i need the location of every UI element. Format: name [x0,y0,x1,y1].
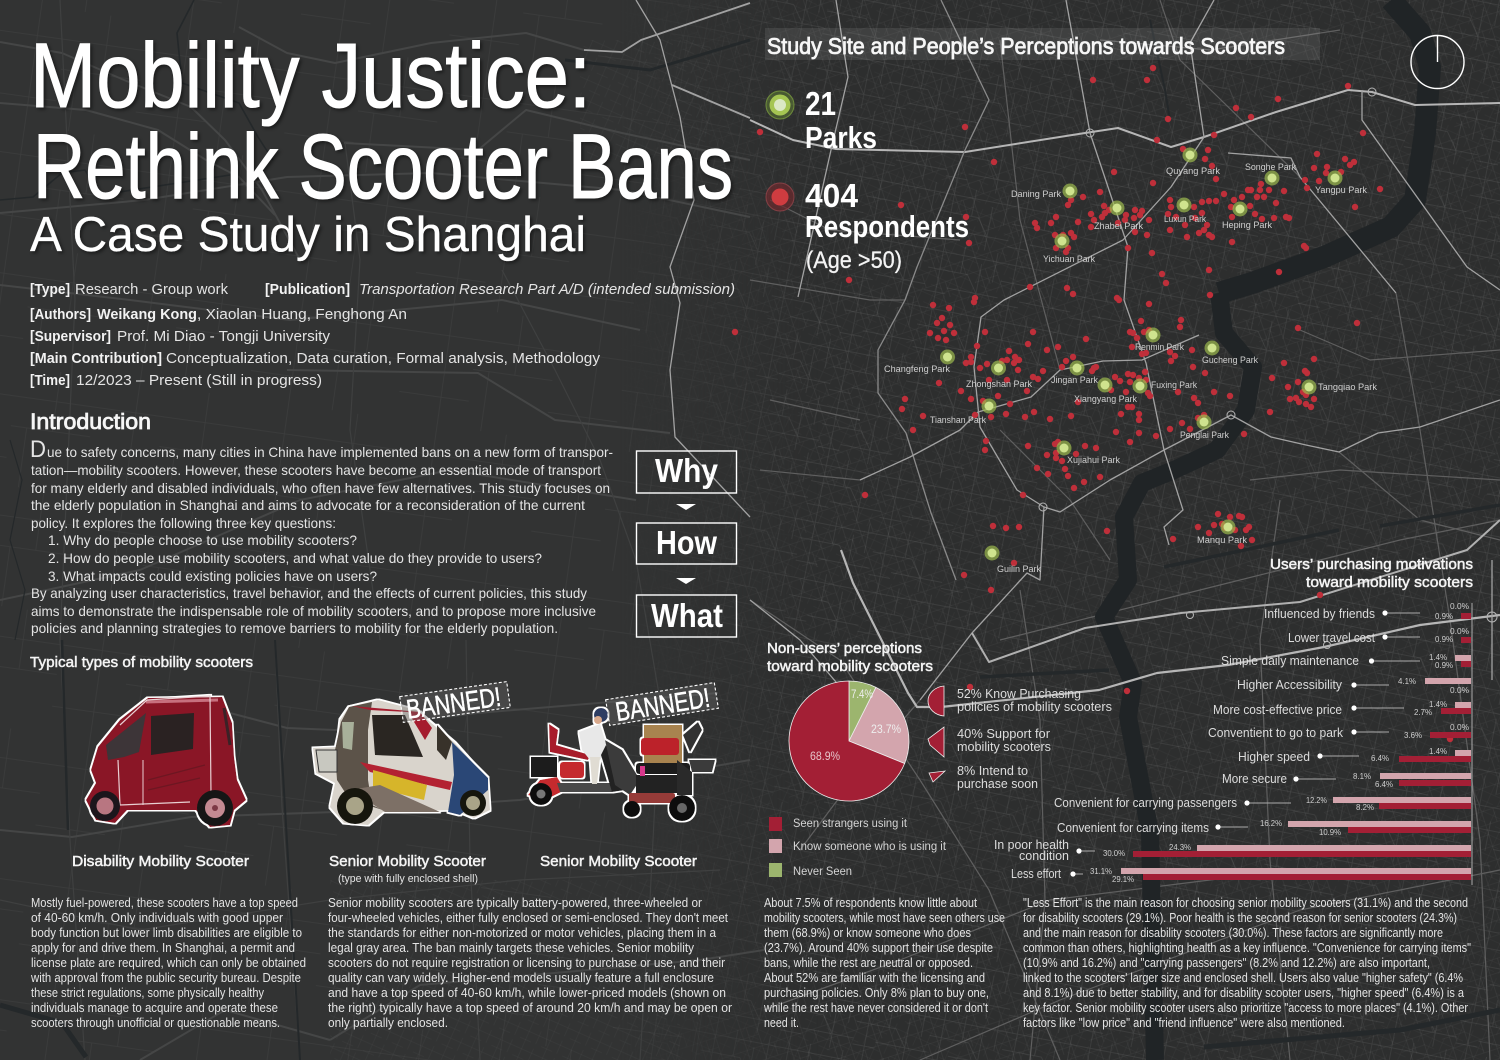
value labels: 31.1% [1090,866,1112,876]
park labels: Zhabei Park [1094,221,1143,232]
why how what flow [636,451,736,637]
introduction text: D [30,436,46,463]
study site heading: Study Site and People’s Perceptions towards Scooters [767,33,1285,59]
text: disability scooter description: these strict regulations, some physically healthy [31,985,264,1000]
park labels: Changfeng Park [884,364,950,375]
why how what flow: What [651,597,723,634]
value labels: 1.4% [1429,699,1447,709]
text: senior scooter description: Senior mobility scooters are typically battery-powered, three-wheeled or [328,895,703,910]
park markers [940,148,1342,560]
category labels: Convenient for carrying passengers [1054,795,1237,810]
value labels: 0.9% [1435,611,1453,621]
title: Mobility Justice: [30,25,591,127]
pink bars [1121,655,1471,874]
pie legend: Seen strangers using it [793,818,908,830]
pie legend: Know someone who is using it [793,841,947,853]
park labels: Jingan Park [1051,375,1098,386]
introduction text: tation—mobility scooters. However, these scooters have become an essential mode of transport [31,462,601,478]
project metadata: [Supervisor] [30,328,111,345]
pie chart [789,681,909,801]
map legend: Parks [805,120,877,155]
introduction text: for many elderly and disabled individuals, who often have few alternatives. This study focuses on [31,480,610,496]
text: disability scooter description [30,895,306,1030]
text: non-user findings: while the rest have never considered it or don't [763,1000,988,1015]
non-users heading: toward mobility scooters [767,658,933,675]
value labels: 30.0% [1103,848,1125,858]
value labels: 6.4% [1371,753,1389,763]
category labels: Lower travel cost [1288,630,1375,645]
project metadata: 12/2023 – Present (Still in progress) [76,372,322,389]
text: non-user findings: (23.7%). Around 40% support their use despite [764,940,993,955]
map legend: (Age >50) [806,247,902,274]
map legend [766,85,969,274]
value labels: 8.2% [1356,802,1374,812]
value labels: 0.0% [1450,685,1469,695]
text: senior scooter description [328,895,733,1030]
value labels: 16.2% [1260,818,1282,828]
value labels [1090,601,1469,884]
text: senior scooter description: four-wheeled vehicles, either fully enclosed or semi-enclosed. They don't meet [328,910,728,925]
non-user statistics: policies of mobility scooters [957,699,1112,714]
introduction text [30,436,613,636]
banned tag 2: BANNED! [613,683,712,727]
motivations heading: Users’ purchasing motivations [1270,556,1473,573]
introduction text: ue to safety concerns, many cities in China have implemented bans on a new form of transpor- [47,444,613,460]
park labels: Zhongshan Park [966,379,1032,390]
text: non-user findings: mobility scooters, while most have seen others use [764,910,1005,925]
value labels: 29.1% [1112,874,1134,884]
text: senior scooter description: legal gray area. The ban mainly targets these vehicles. Senior mobility [328,940,694,955]
text: senior scooter description: the standards for either non-motorized or motor vehicles, placing them in a [328,925,717,940]
value labels: 0.0% [1450,626,1469,636]
north arrow [1411,36,1464,88]
text: non-user findings: About 52% are familiar with the licensing and [764,970,985,985]
park labels: Tianshan Park [930,415,986,426]
text: user motivation findings: factors like "low price" and "friend influence" were also mentioned. [1023,1015,1345,1030]
scooter labels: Senior Mobility Scooter [329,853,486,870]
text: senior scooter description: only partially enclosed. [328,1015,448,1030]
park labels: Manqu Park [1197,535,1247,546]
map legend: 21 [805,85,836,122]
category labels: Less effort [1011,866,1061,881]
value labels: 3.6% [1404,730,1422,740]
text: disability scooter description: individuals manage to acquire and operate these [31,1000,278,1015]
introduction heading: Introduction [30,409,151,434]
why how what flow: Why [655,452,719,489]
introduction text: policy. It explores the following three key questions: [31,515,336,531]
text: disability scooter description: Mostly fuel-powered, these scooters have a top speed [31,895,298,910]
image: red disability scooter [86,696,246,827]
value labels: 10.9% [1319,827,1341,837]
value labels: 1.4% [1429,652,1447,662]
category labels: Influenced by friends [1264,606,1375,621]
non-user statistics: purchase soon [957,776,1038,791]
text: non-user findings: purchasing policies. Only 8% plan to buy one, [764,985,989,1000]
value labels: 24.3% [1169,842,1191,852]
non-user statistics [928,686,1112,791]
non-user statistics: 52% Know Purchasing [957,686,1081,701]
non-user statistics: mobility scooters [957,739,1051,754]
project metadata: Research - Group work [75,281,228,298]
category labels: Simple daily maintenance [1221,653,1359,668]
category labels: Higher Accessibility [1237,677,1342,692]
text: non-user findings: bans, while the rest are neutral or opposed. [764,955,973,970]
title: Rethink Scooter Bans [33,116,733,218]
text: user motivation findings [1023,895,1471,1030]
text: senior scooter description: and have a top speed of 40-60 km/h, while lower-priced models (shown on [328,985,726,1000]
value labels: 6.4% [1375,779,1393,789]
motivations heading: toward mobility scooters [1306,574,1473,591]
project metadata: [Publication] [265,281,350,298]
leader dots [1070,610,1388,877]
park labels: Daning Park [1011,189,1061,200]
park labels: Quyang Park [1166,166,1220,177]
park labels: Gucheng Park [1202,355,1258,366]
project metadata [30,281,735,389]
leader lines [1073,613,1420,874]
banned tag 1: BANNED! [405,682,503,725]
map legend: Respondents [805,209,969,244]
text: disability scooter description: apply for and drive them. In Shanghai, a permit and [31,940,295,955]
text: disability scooter description: of 40-60 km/h. Only individuals with good upper [31,910,284,925]
diverging bar chart [994,601,1472,885]
park labels: Luxun Park [1164,214,1206,225]
park labels: Xujiahui Park [1067,455,1120,466]
text: disability scooter description: license plate are required, which can only be obtained [31,955,306,970]
light expressways [584,0,1500,710]
introduction text: 2. How do people use mobility scooters, and what value do they provide to users? [48,550,542,566]
pie legend: Never Seen [793,866,852,878]
park labels: Fuxing Park [1151,380,1197,391]
scooter labels: Disability Mobility Scooter [72,853,249,870]
river [1219,0,1430,293]
pie chart: 7.4% [851,687,873,701]
value labels: 0.0% [1450,722,1469,732]
text: disability scooter description: with approval from the public security bureau. Despite [30,970,301,985]
category labels [994,606,1375,881]
non-users heading: Non-users’ perceptions [767,640,922,657]
value labels: 0.9% [1435,634,1453,644]
category labels: Higher speed [1238,749,1310,764]
title [30,25,733,262]
respondent points [735,68,1450,739]
pie legend [769,817,947,878]
value labels: 1.4% [1429,746,1447,756]
text: non-user findings: About 7.5% of respondents know little about [764,895,977,910]
image: open senior scooter with rider [528,708,715,821]
map legend: 404 [805,177,859,214]
category labels: More cost-effective price [1213,702,1342,717]
introduction text: 3. What impacts could existing policies have on users? [48,568,377,584]
project metadata: , Xiaolan Huang, Fenghong An [197,306,407,323]
park labels: Guilin Park [997,564,1041,575]
value labels: 0.0% [1450,601,1469,611]
text: disability scooter description: body function but lower limb disabilities are eligible to [31,925,302,940]
category labels: More secure [1222,771,1287,786]
red bars [1133,613,1471,880]
park labels [884,162,1377,575]
value labels: 2.7% [1414,707,1432,717]
introduction text: By analyzing user characteristics, travel behavior, and the effects of current policies, this study [31,585,587,601]
project metadata: [Main Contribution] [30,350,162,367]
park labels: Tangqiao Park [1318,382,1377,393]
project metadata: [Time] [30,372,70,389]
why how what flow: How [656,524,717,561]
project metadata: Transportation Research Part A/D (intended submission) [359,281,735,298]
typical types heading: Typical types of mobility scooters [30,654,253,671]
non-users heading [767,640,933,675]
text: user motivation findings: (10.9% and 16.2%) and "carrying passengers" (8.2% and 12.2%) are also important, [1023,955,1430,970]
scooter labels: (type with fully enclosed shell) [338,873,478,885]
text: senior scooter description: quality can vary widely. Higher-end models usually feature a full enclosure [328,970,714,985]
park labels: Songhe Park [1245,162,1296,173]
category labels: In poor health [994,837,1069,852]
park labels: Heping Park [1222,220,1272,231]
park labels: Renmin Park [1135,342,1184,353]
category labels: Convenient for carrying items [1057,820,1209,835]
value labels: 0.9% [1435,660,1453,670]
project metadata: Prof. Mi Diao - Tongji University [117,328,331,345]
text: senior scooter description: scooters do not require registration or licensing to purchase or use, and their [328,955,726,970]
title: A Case Study in Shanghai [30,208,586,262]
pie chart: 23.7% [871,722,901,736]
image: enclosed senior scooter [313,700,490,825]
park labels: Penglai Park [1180,430,1229,441]
project metadata: Weikang Kong [97,306,197,323]
value labels: 12.2% [1306,795,1327,805]
introduction text: the elderly population in Shanghai and aims to advocate for a reconsideration of the current [31,497,585,513]
non-user statistics: 40% Support for [957,726,1051,741]
text: disability scooter description: scooters through unofficial or questionable means. [31,1015,280,1030]
value labels: 8.1% [1353,771,1371,781]
text: senior scooter description: the right) typically have a top speed of around 20 km/h and may be open or [328,1000,733,1015]
project metadata: [Type] [30,281,70,298]
park labels: Yichuan Park [1043,254,1095,265]
category labels: condition [1019,848,1069,863]
text: non-user findings: them (68.9%) or know someone who does [764,925,971,940]
pie chart: 68.9% [810,749,840,763]
category labels: Conventient to go to park [1208,725,1343,740]
project metadata: Conceptualization, Data curation, Formal analysis, Methodology [166,350,601,367]
text: non-user findings [763,895,1005,1030]
non-user statistics: 8% Intend to [957,763,1028,778]
introduction text: 1. Why do people choose to use mobility scooters? [48,532,357,548]
project metadata: [Authors] [30,306,91,323]
park labels: Yangpu Park [1315,185,1367,196]
scooter labels: Senior Mobility Scooter [540,853,697,870]
value labels: 4.1% [1398,676,1416,686]
scooter labels [72,853,697,885]
introduction text: aims to demonstrate the indispensable role of mobility scooters, and to propose more inclusive [31,603,596,619]
park labels: Xiangyang Park [1074,394,1137,405]
text: non-user findings: need it. [764,1015,799,1030]
introduction text: policies and planning strategies to remove barriers to mobility for the elderly population. [31,620,558,636]
motivations heading [1270,556,1473,591]
